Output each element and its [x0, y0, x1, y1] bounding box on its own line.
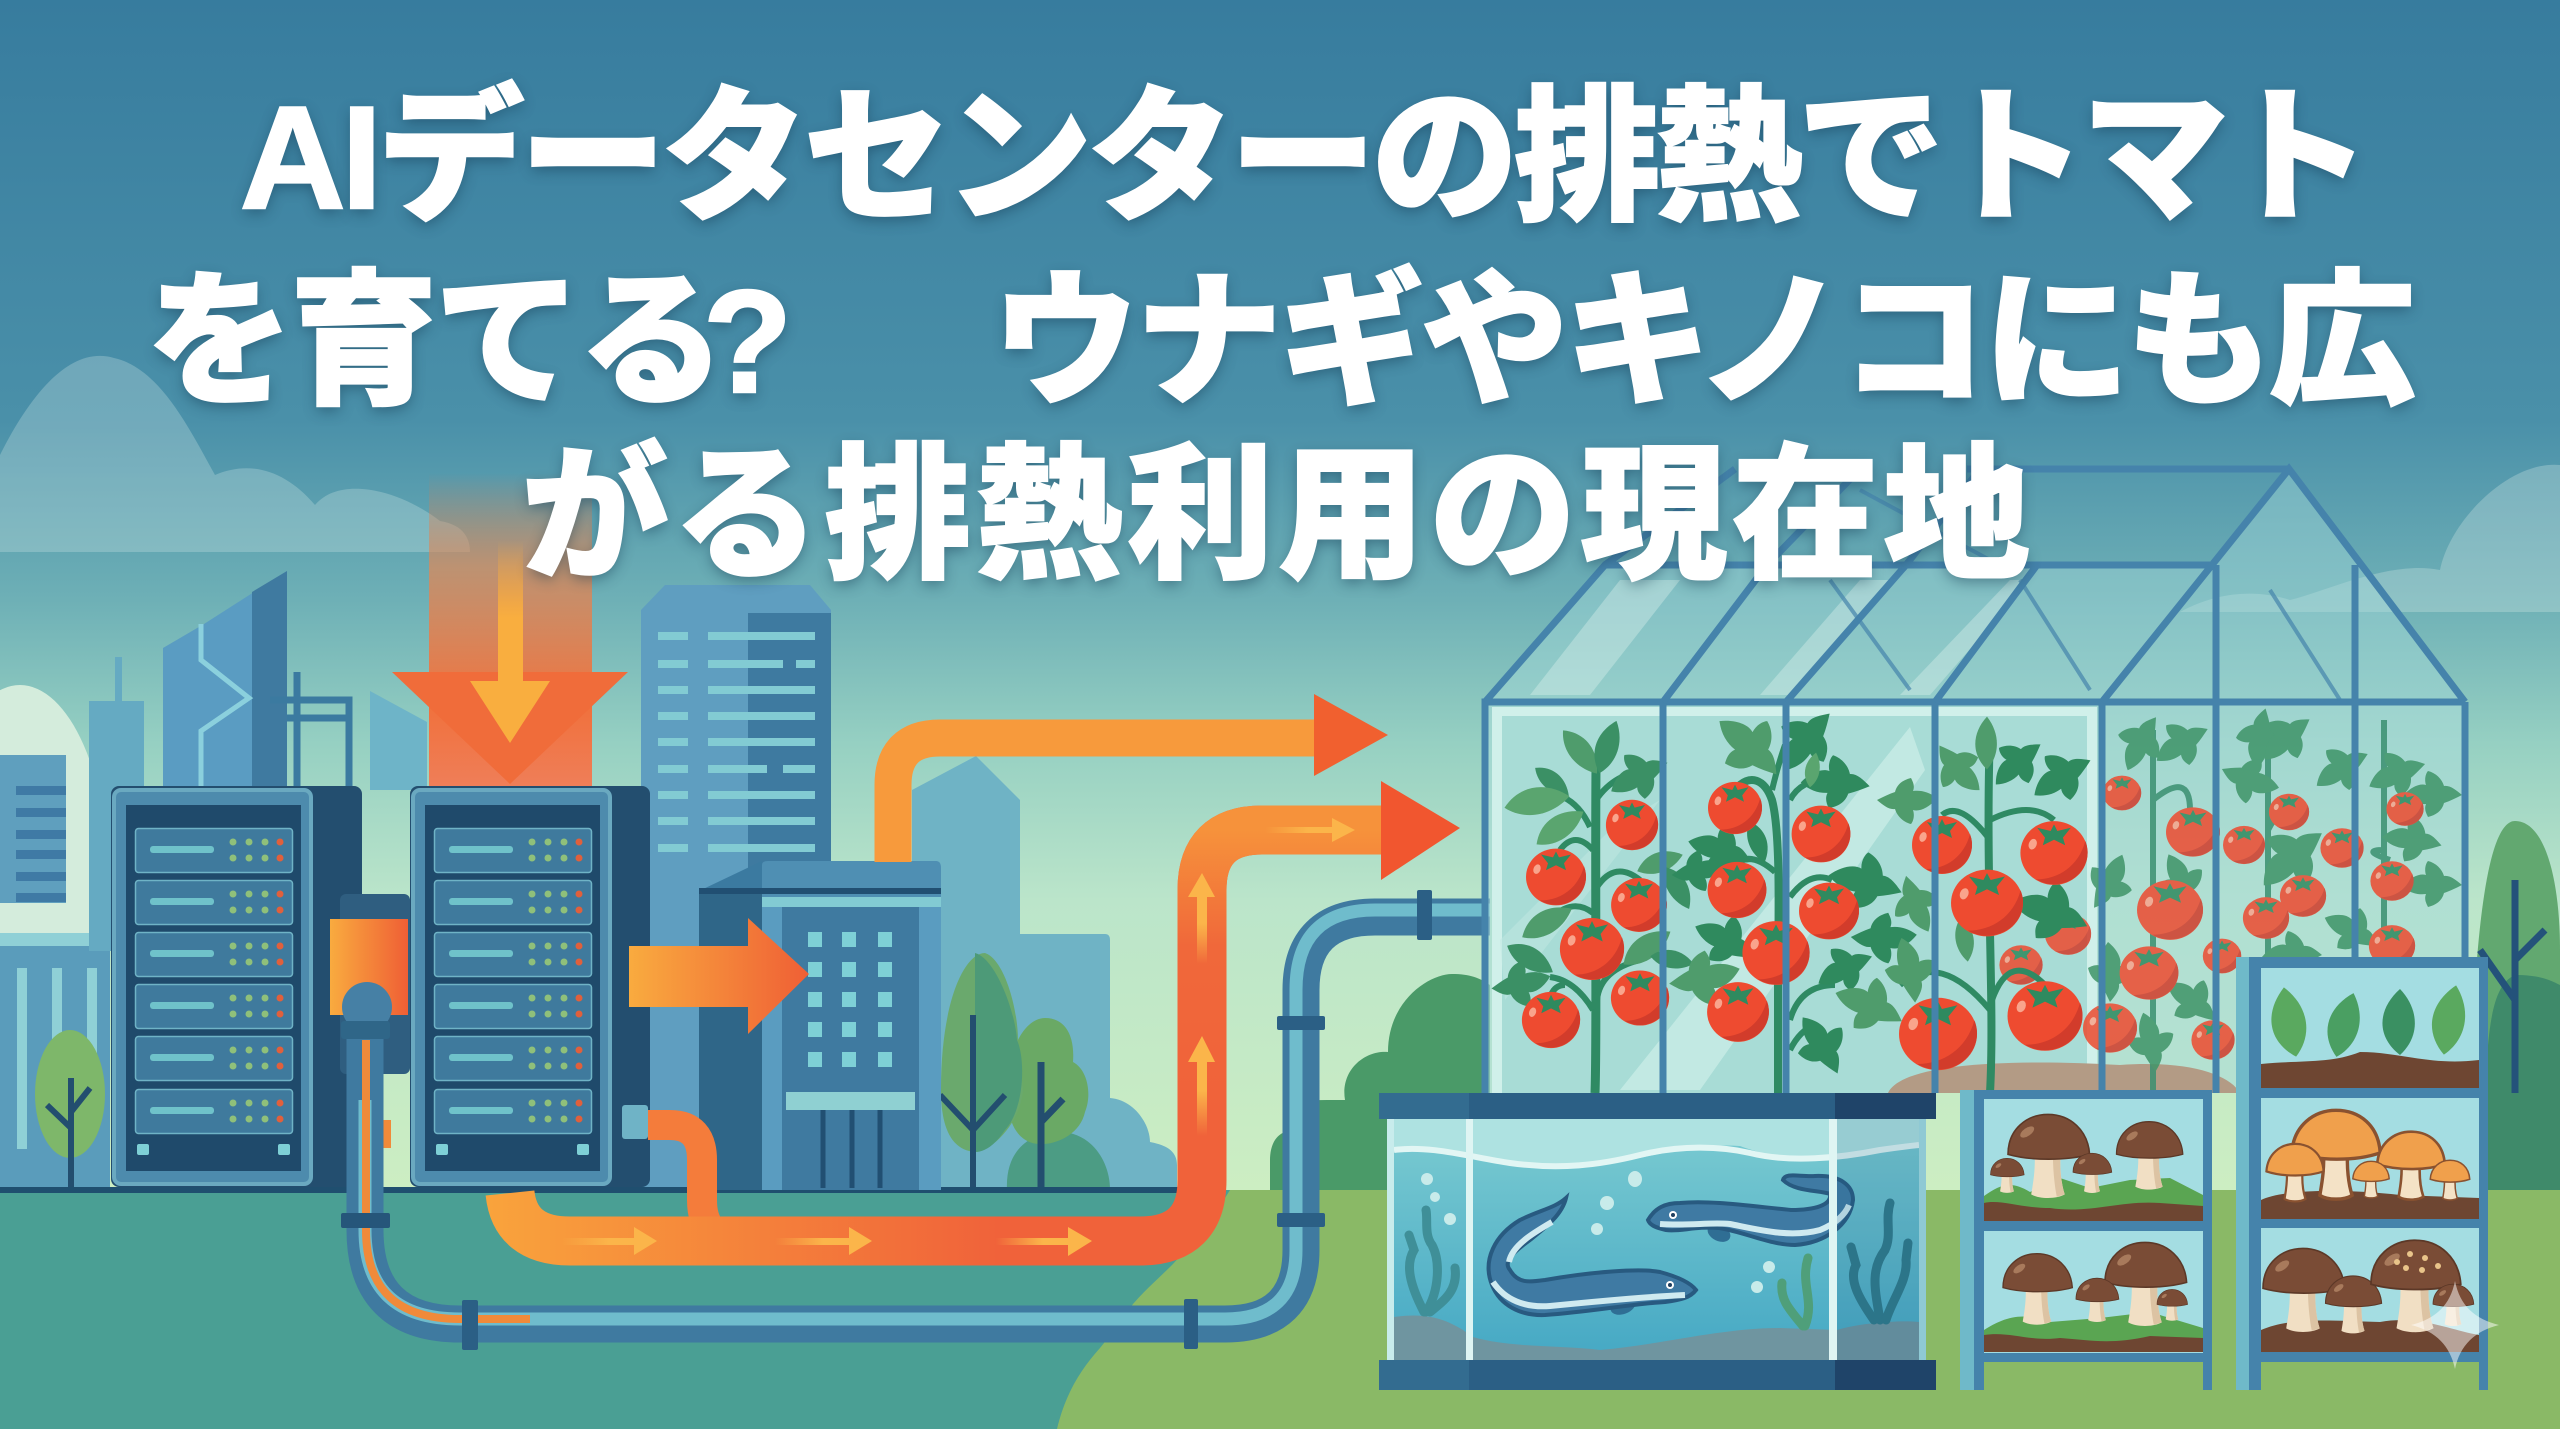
- server rack left: [114, 790, 311, 1184]
- soil top: [2261, 1052, 2479, 1088]
- skyline buildings: [0, 571, 1177, 1190]
- connector from rack to pipe: [622, 1105, 648, 1139]
- greenhouse frame: [1485, 469, 2465, 1093]
- arrow: heat flowing down into server: [392, 473, 628, 786]
- title line 3: がる排熱利用の現在地: [522, 434, 2035, 597]
- tomato plant 3: [1851, 717, 2103, 1093]
- watermark sparkle: [2411, 1281, 2499, 1369]
- upper orange arrow: [893, 694, 1388, 862]
- server rack right: [413, 790, 610, 1184]
- greenhouse glass: [1485, 469, 2465, 1093]
- tomato plant 1: [1488, 717, 1698, 1093]
- brown mushrooms: [2263, 1240, 2474, 1333]
- office building: [699, 861, 941, 1190]
- eel tank: [1379, 1093, 1936, 1390]
- mushroom shelf B: [2236, 957, 2488, 1390]
- tank gravel: [1394, 1316, 1919, 1360]
- mushrooms upper: [1990, 1114, 2183, 1198]
- tank rims: [1379, 1093, 1936, 1390]
- pipe clamps: [462, 890, 1432, 1350]
- soil middle: [2261, 1191, 2479, 1219]
- trees left: [35, 953, 1110, 1190]
- title line 1: AIデータセンターの排熱でトマト: [240, 76, 2366, 239]
- mushroom shelf A: [1960, 1090, 2212, 1390]
- pipe head valve: [341, 982, 392, 1228]
- clouds left: [0, 356, 470, 552]
- orange heat pipe: main route to greenhouse: [510, 830, 1390, 1241]
- arrow head: to greenhouse: [1381, 781, 1460, 880]
- tomato soil: [1888, 1062, 2240, 1093]
- water plants: [1409, 1203, 1908, 1326]
- soil and grass upper: [1984, 1178, 2203, 1221]
- server rack coupler: [330, 894, 410, 1148]
- greenhouse: [1485, 469, 2465, 1093]
- tank glass side: [1387, 1118, 1926, 1360]
- return water pipe: [365, 910, 1490, 1324]
- bubbles: [1421, 1171, 1775, 1293]
- ground line: [0, 1187, 1180, 1193]
- arrow: rack to building: [629, 918, 809, 1034]
- tomato plants back row: [1999, 701, 2462, 1093]
- rack back left: [111, 786, 362, 1187]
- small flow arrows: [561, 818, 1355, 1256]
- mushrooms lower: [2003, 1242, 2188, 1326]
- ground: [0, 1190, 2560, 1429]
- rack back right: [410, 786, 650, 1187]
- eel lower: [1489, 1198, 1696, 1318]
- bushes behind greenhouse: [1270, 821, 2560, 1190]
- orange mushrooms: [2266, 1110, 2470, 1201]
- eel upper: [1648, 1175, 1853, 1245]
- seedlings: [2266, 982, 2471, 1061]
- title line 2: を育てる? ウナギやキノコにも広: [147, 260, 2413, 423]
- tomato plant 2: [1665, 695, 1914, 1093]
- soil bottom: [2261, 1320, 2479, 1352]
- clouds right: [2180, 465, 2560, 612]
- soil and grass lower: [1984, 1312, 2203, 1352]
- cap spots: [2394, 1251, 2441, 1273]
